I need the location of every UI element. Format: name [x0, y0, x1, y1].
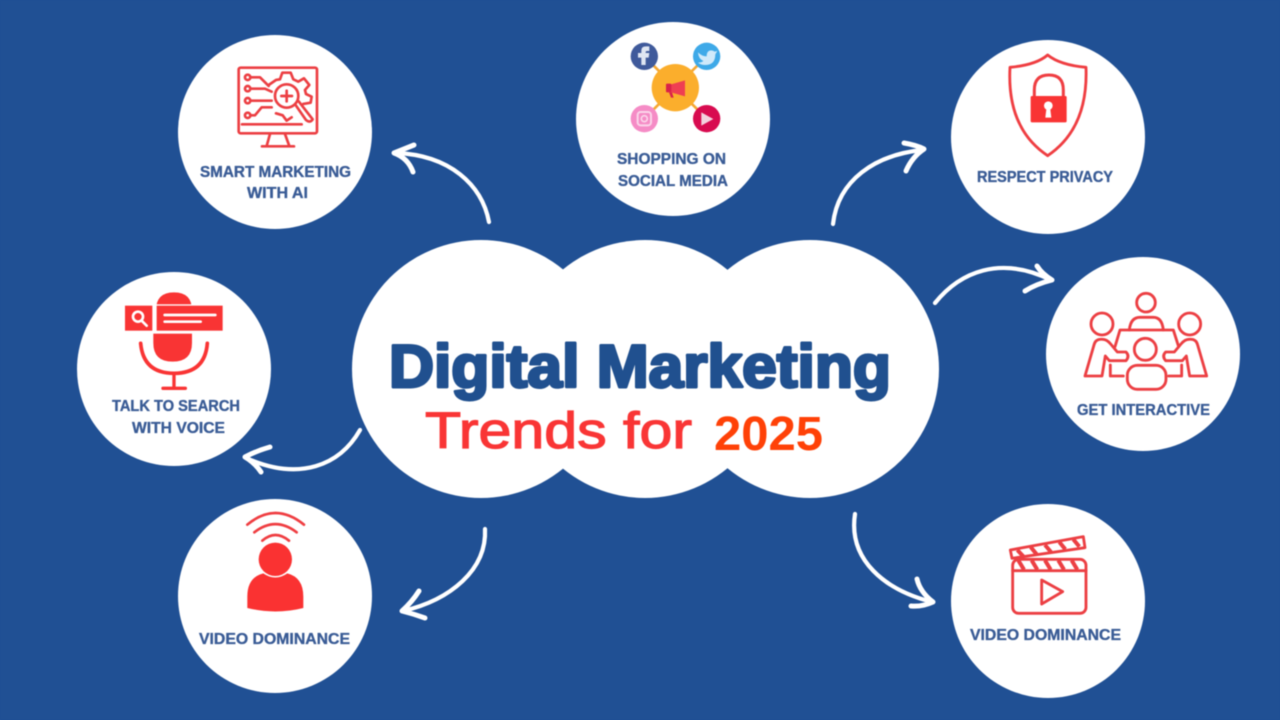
- panel: smart marketing with AI: [178, 35, 372, 229]
- icon: microphone with search bar: [125, 292, 225, 388]
- central cloud panel: [352, 240, 939, 498]
- arrow: to smart marketing: [394, 145, 489, 222]
- icon: people around a table: [1085, 293, 1207, 389]
- icon: monitor with gear and magnifier: [239, 68, 317, 146]
- icon: social media network: [631, 43, 720, 132]
- icon: film clapperboard: [1010, 537, 1086, 613]
- icon: shield with padlock: [1010, 55, 1086, 156]
- label: smart marketing: SMART MARKETING: [200, 164, 351, 181]
- panel: respect privacy: [951, 40, 1145, 234]
- arrow: to video dominance left: [402, 529, 485, 618]
- label: video dominance: VIDEO DOMINANCE: [199, 631, 350, 648]
- panel: video dominance left: [178, 499, 372, 693]
- label: respect privacy: RESPECT PRIVACY: [977, 169, 1114, 186]
- arrow: to get interactive: [935, 266, 1052, 303]
- label: with voice: WITH VOICE: [132, 420, 225, 437]
- arrow: to respect privacy: [833, 143, 924, 224]
- label: get interactive: GET INTERACTIVE: [1077, 402, 1210, 419]
- panel: shopping on social media: [576, 22, 770, 216]
- year: 2025: 2025: [714, 408, 823, 461]
- title: Digital Marketing: Digital Marketing: [389, 333, 891, 400]
- panel: get interactive: [1046, 257, 1240, 451]
- label: shopping on: SHOPPING ON: [617, 151, 726, 168]
- arrow: to talk to search: [245, 430, 360, 472]
- panel: talk to search with voice: [77, 272, 271, 466]
- label: talk to search: TALK TO SEARCH: [112, 398, 240, 415]
- arrow: to video dominance right: [854, 514, 933, 606]
- label: social media: SOCIAL MEDIA: [618, 173, 728, 190]
- label: video dominance: VIDEO DOMINANCE: [970, 627, 1121, 644]
- subtitle: Trends for: Trends for: [425, 402, 692, 459]
- icon: person with signal waves: [247, 513, 304, 611]
- panel: video dominance right: [951, 504, 1145, 698]
- label: with AI: WITH AI: [247, 185, 308, 202]
